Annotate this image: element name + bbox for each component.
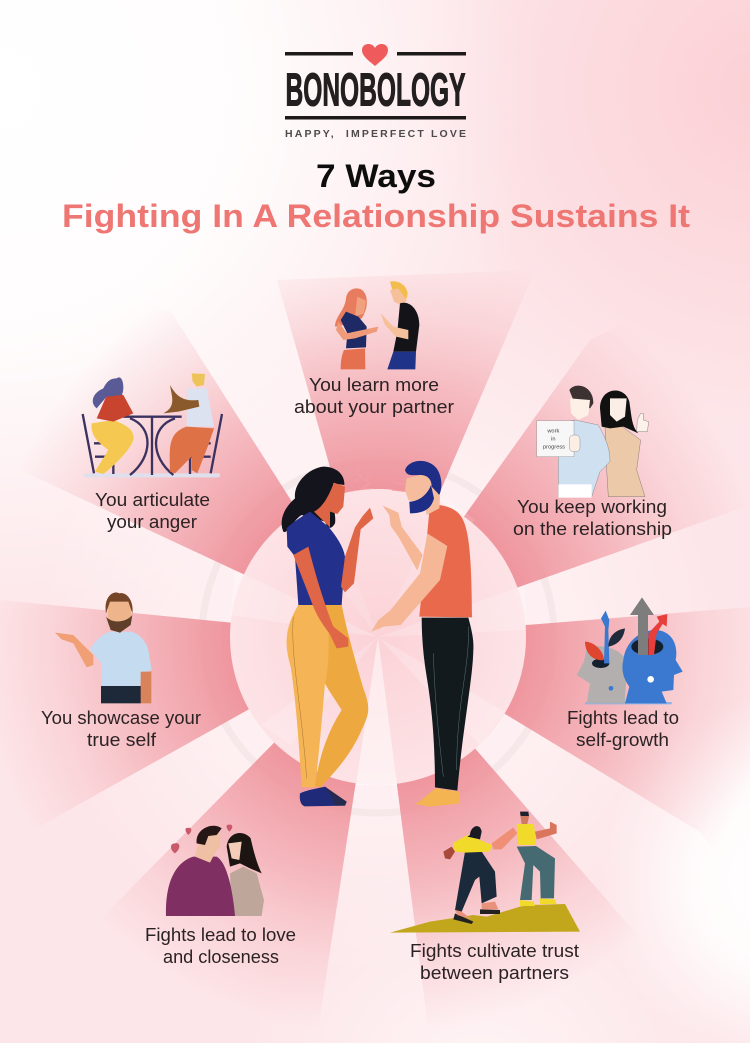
item: fights cultivate trust between partners [390, 812, 580, 983]
item: you showcase your true self [41, 592, 201, 750]
item: you learn more about your partner: about your partner [294, 396, 454, 417]
item: you articulate your anger [83, 373, 222, 532]
label: You learn more [309, 374, 439, 395]
woman [282, 467, 373, 806]
illustration: loving couple [166, 825, 264, 916]
illustration: couple with sign: progress [543, 444, 565, 450]
wordmark: BONOBOLOGY [286, 64, 466, 116]
item: fights lead to self-growth: self-growth [576, 729, 669, 750]
illustration: heads with arrow and plants [577, 597, 683, 704]
item: you showcase your true self: true self [87, 729, 157, 750]
illustration: couple with sign [537, 386, 649, 498]
central figures: arguing couple [282, 461, 473, 807]
anger squiggles [354, 465, 407, 492]
title: 7 Ways [316, 158, 436, 194]
illustration: partners climbing a hill [390, 812, 580, 933]
item: fights lead to self-growth [567, 597, 683, 750]
title [62, 158, 690, 234]
item: fights lead to love and closeness: and closeness [163, 946, 279, 967]
man [371, 461, 473, 807]
item: fights cultivate trust between partners: between partners [420, 962, 569, 983]
item: you learn more about your partner [294, 281, 454, 417]
item: you articulate your anger: your anger [107, 511, 197, 532]
subtitle: Fighting In A Relationship Sustains It [62, 198, 690, 234]
radial wedges and centre disc [0, 260, 750, 1043]
logo [285, 44, 466, 140]
tagline: HAPPY, IMPERFECT LOVE [285, 128, 466, 140]
item: you keep working on the relationship [513, 386, 672, 539]
label: You showcase your [41, 707, 201, 728]
label: You keep working [517, 496, 667, 517]
label: You articulate [95, 489, 210, 510]
icon: heart [362, 44, 388, 66]
sign text: work [546, 429, 559, 435]
label: Fights lead to love [145, 924, 296, 945]
illustration: bearded man [55, 592, 152, 703]
label: Fights cultivate trust [410, 940, 579, 961]
label: Fights lead to [567, 707, 679, 728]
item: you keep working on the relationship: on the relationship [513, 518, 672, 539]
item: fights lead to love and closeness [145, 825, 296, 967]
illustration: couple with sign: in [551, 437, 556, 443]
illustration: couple at table [83, 373, 222, 477]
illustration: couple talking [335, 281, 419, 369]
